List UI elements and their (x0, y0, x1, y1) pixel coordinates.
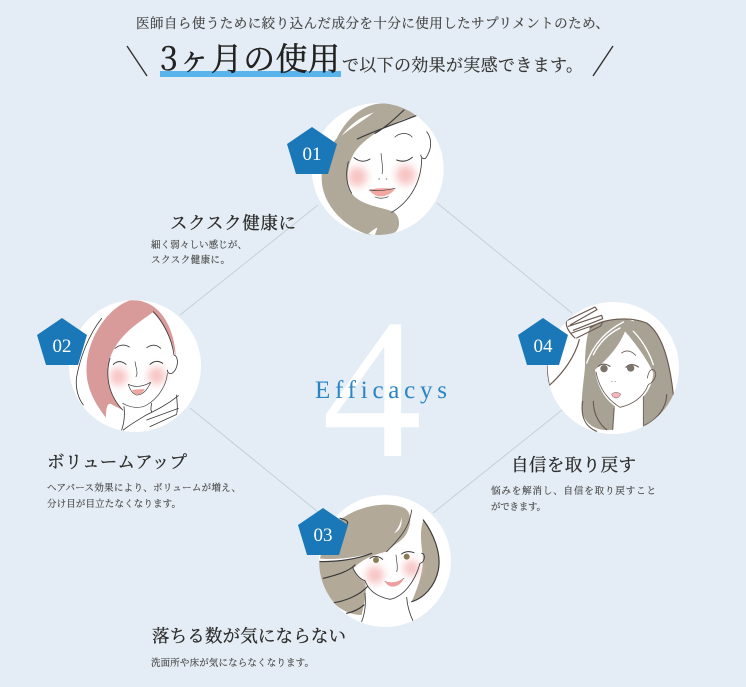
heading 03: 落ちる数が気にならない (152, 626, 346, 646)
description 04 (491, 485, 656, 513)
badge 02: 02 (52, 336, 72, 357)
intro sentence: 医師自ら使うために絞り込んだ成分を十分に使用したサプリメントのため、 (136, 15, 609, 31)
left slash (127, 46, 147, 76)
badge 04 (518, 318, 568, 365)
headline underline (160, 71, 341, 77)
heading 02: ボリュームアップ (47, 452, 188, 472)
description 03: 洗面所や床が気にならなくなります。 (151, 657, 314, 669)
center numeral 4: 4 (322, 279, 422, 500)
description 02 (47, 482, 241, 510)
description 01: 細く弱々しい感じが、 (151, 239, 247, 251)
illustration 03: woman with flowing hair (319, 495, 451, 627)
right slash (593, 46, 613, 76)
description 04: ができます。 (491, 502, 546, 513)
badge 03 (298, 508, 348, 555)
description 04: 悩みを解消し、自信を取り戻すこと (491, 485, 656, 497)
center word Efficacys: Efficacys (315, 377, 447, 404)
illustration 04: worried woman touching hair (547, 302, 679, 434)
description 02: ヘアパース効果により、ボリュームが増え、 (47, 482, 241, 494)
description 02: 分け目が目立たなくなります。 (47, 498, 181, 510)
illustration 01: woman with closed eyes (312, 103, 444, 236)
badge 01 (287, 127, 337, 174)
badge 03: 03 (314, 525, 332, 546)
badge 04: 04 (534, 336, 553, 357)
heading 04: 自信を取り戻す (511, 455, 636, 475)
description 01: スクスク健康に。 (151, 254, 230, 266)
description 01 (151, 239, 247, 266)
headline remainder: で以下の効果が実感できます。 (342, 56, 583, 75)
illustration 02: smiling woman with pink hair (69, 300, 201, 432)
headline emphasis: 3ヶ月の使用 (160, 34, 340, 80)
headline (160, 34, 583, 80)
heading 01: スクスク健康に (170, 213, 296, 233)
connector lines (180, 203, 572, 513)
badge 02 (37, 318, 87, 365)
badge 01: 01 (302, 144, 322, 165)
